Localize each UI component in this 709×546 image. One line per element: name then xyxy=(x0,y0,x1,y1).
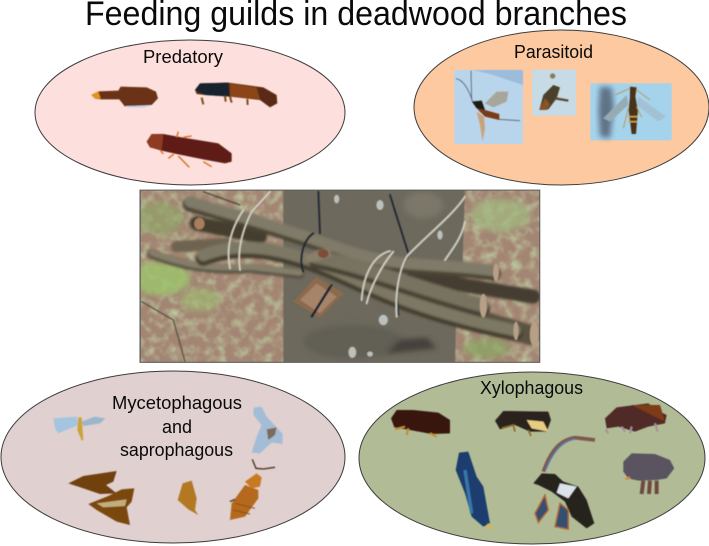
oval: xylophagous background xyxy=(359,372,705,544)
oval: predatory background xyxy=(35,40,345,185)
cut ends of branches xyxy=(194,218,539,346)
photo: wasp 3 xyxy=(590,83,672,140)
photo: branch bundle tied to beech trunk xyxy=(130,190,540,362)
label: Predatory: Predatory xyxy=(143,47,223,67)
oval: parasitoid background xyxy=(414,30,709,185)
ropes and cable ties xyxy=(142,192,465,362)
photos: parasitoid wasps xyxy=(454,70,672,144)
photo border xyxy=(140,190,540,362)
label: Xylophagous: Xylophagous xyxy=(480,378,583,398)
photo: wasp 1 xyxy=(454,70,523,144)
panel: parasitoid xyxy=(414,30,709,185)
panel: xylophagous xyxy=(359,372,705,544)
label: Mycetophagous and saprophagous: Mycetophagous xyxy=(112,393,242,413)
insects: predatory beetles xyxy=(91,83,277,167)
branches xyxy=(152,202,533,335)
insects: mycetophagous beetles and moths xyxy=(53,407,283,525)
photo frame and contents xyxy=(130,190,540,362)
panel: predatory xyxy=(35,40,345,185)
panel: mycetophagous and saprophagous xyxy=(1,371,345,543)
label: Parasitoid: Parasitoid xyxy=(514,42,593,62)
label: Mycetophagous and saprophagous xyxy=(112,393,242,460)
label: Mycetophagous and saprophagous: saprophagous xyxy=(120,440,233,460)
label: Mycetophagous and saprophagous: and xyxy=(162,417,192,437)
wooden nest box xyxy=(293,277,344,318)
photo: wasp 2 xyxy=(532,70,576,116)
insects: xylophagous beetles xyxy=(391,403,674,529)
tree trunk xyxy=(283,190,465,362)
oval: mycetophagous background xyxy=(1,371,345,543)
